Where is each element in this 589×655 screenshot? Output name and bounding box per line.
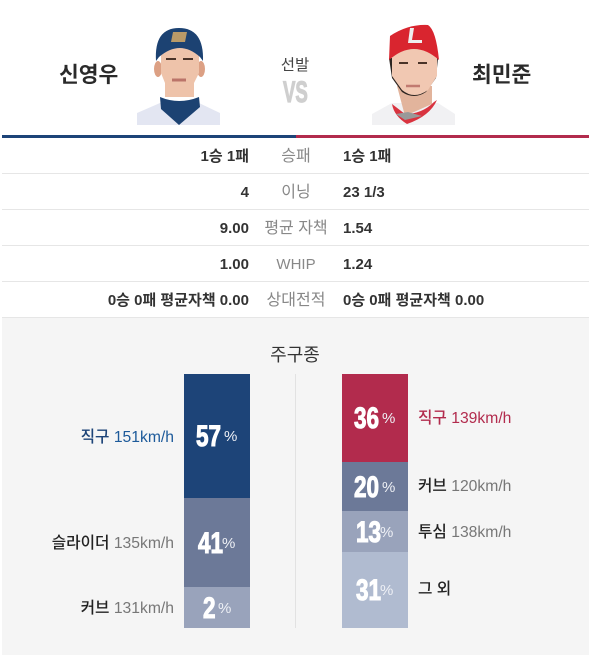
segment: fastball 36% xyxy=(342,374,408,462)
VS mark: VS xyxy=(283,76,308,109)
segment: fastball 57%: % xyxy=(224,428,237,445)
label: other right: 그 외 xyxy=(418,581,451,598)
row: WHIP: 1.00 xyxy=(220,256,249,273)
segment: curve 20%: 20 xyxy=(354,470,379,504)
segment: sinker 13%: 13 xyxy=(356,516,381,548)
segment: sinker 13% xyxy=(342,511,408,552)
label: fastball left: 직구 151km/h xyxy=(81,429,174,446)
stats table xyxy=(2,148,589,318)
label: sinker right: 투심 138km/h xyxy=(418,524,511,541)
segment: curve 20% xyxy=(342,462,408,511)
pitch mix heading: 주구종 xyxy=(270,345,320,365)
row: innings xyxy=(2,174,589,210)
segment: slider 41%: 41 xyxy=(198,526,223,560)
row: ERA: 평균 자책 xyxy=(264,220,328,237)
pitcher name: right: 최민준 xyxy=(472,63,531,87)
row: ERA xyxy=(2,210,589,246)
label: slider left: 슬라이더 135km/h xyxy=(52,535,174,552)
row: ERA: 9.00 xyxy=(220,220,249,237)
segment: curve 2% xyxy=(184,587,250,628)
team color bar: left xyxy=(2,135,296,138)
starter label: 선발 xyxy=(281,57,309,74)
segment: curve 2%: % xyxy=(218,600,231,616)
row: WHIP: WHIP xyxy=(276,256,316,273)
label: fastball right: 직구 139km/h xyxy=(418,410,511,427)
segment: other 31%: 31 xyxy=(356,574,381,607)
segment: curve 2%: 2 xyxy=(203,592,216,624)
row: innings: 4 xyxy=(241,184,249,201)
label: curve left: 커브 131km/h xyxy=(81,600,174,617)
row: record: 1승 1패 xyxy=(201,148,249,165)
row: head to head: 0승 0패 평균자책 0.00 xyxy=(343,292,484,309)
segment: curve 20%: % xyxy=(382,478,395,496)
row: innings: 23 1/3 xyxy=(343,184,385,201)
row: record: 1승 1패 xyxy=(343,148,391,165)
row: head to head xyxy=(2,282,589,318)
photo: right pitcher xyxy=(372,24,455,125)
segment: fastball 36%: 36 xyxy=(354,402,379,435)
right pitch bar xyxy=(342,374,408,628)
row: head to head: 상대전적 xyxy=(267,292,325,309)
segment: other 31%: % xyxy=(380,582,393,599)
segment: fastball 36%: % xyxy=(382,410,395,427)
row: WHIP: 1.24 xyxy=(343,256,372,273)
segment: slider 41%: % xyxy=(222,534,235,552)
row: innings: 이닝 xyxy=(281,184,311,201)
pitcher name: left: 신영우 xyxy=(59,63,118,87)
center divider xyxy=(295,374,296,628)
team color bar: right xyxy=(296,135,589,138)
segment: fastball 57% xyxy=(184,374,250,498)
left pitch bar xyxy=(184,374,250,628)
label: curve right: 커브 120km/h xyxy=(418,478,511,495)
row: record xyxy=(2,138,589,174)
segment: other 31% xyxy=(342,552,408,628)
segment: fastball 57%: 57 xyxy=(196,420,221,453)
row: WHIP xyxy=(2,246,589,282)
photo: left pitcher xyxy=(137,28,220,125)
row: head to head: 0승 0패 평균자책 0.00 xyxy=(108,292,249,309)
row: ERA: 1.54 xyxy=(343,220,372,237)
row: record: 승패 xyxy=(281,148,311,165)
panel: pitch mix xyxy=(2,318,589,655)
segment: sinker 13%: % xyxy=(380,524,393,540)
header: pitcher matchup xyxy=(2,24,589,138)
segment: slider 41% xyxy=(184,498,250,587)
